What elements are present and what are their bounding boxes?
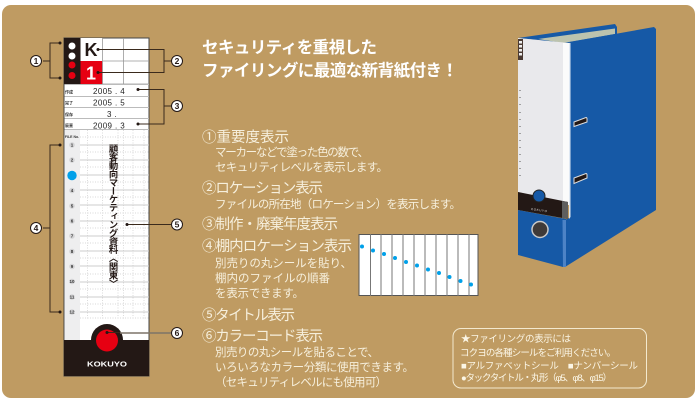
shelf number column: 10 (69, 279, 75, 284)
note box: コクヨの各種シールをご利用ください。 (460, 347, 616, 359)
date rows: 廃棄 (65, 122, 73, 128)
note box: ■アルファベットシール ■ナンバーシール (461, 361, 638, 372)
shelf number column: 8 (71, 249, 74, 254)
section 6 text: 別売りの丸シールを貼ることで、 (215, 345, 379, 359)
date rows (64, 84, 149, 130)
blue binder (518, 24, 656, 267)
section 6 text: （セキュリティレベルにも使用可） (215, 375, 387, 389)
callout 3 (136, 88, 182, 126)
shelf number column: 9 (71, 264, 74, 269)
back cover and pages (518, 24, 617, 44)
shelf number column: 5 (71, 204, 74, 208)
front cover (563, 27, 656, 267)
section 1 text (202, 129, 388, 174)
date rows: 2005 . 4 (93, 87, 125, 96)
section 2 text: ファイルの所在地（ロケーション）を表示します。 (215, 197, 461, 211)
section 1 text: ①重要度表示 (202, 129, 289, 146)
callout 4 (30, 144, 62, 314)
callout 6: 6 (175, 328, 180, 338)
date rows: 作成 (65, 88, 73, 94)
black footer with colour code seal: KOKUYO (87, 362, 128, 368)
main heading: ファイリングに最適な新背紙付き！ (202, 60, 458, 80)
shelf order chart (359, 234, 478, 296)
shelf number column: 7 (71, 234, 74, 238)
section 5 text: ⑤タイトル表示 (202, 307, 295, 324)
callout 2 (96, 48, 182, 74)
spine small numbers (519, 90, 521, 176)
finger ring (532, 222, 548, 238)
note box: ●タックタイトル・丸形（φ5、φ8、φ15） (461, 372, 612, 384)
location K cell: K (84, 40, 98, 60)
security level marker column (64, 38, 80, 84)
title grid (80, 130, 149, 320)
note box: ★ファイリングの表示には (461, 333, 571, 345)
date rows: 3 . (107, 110, 117, 119)
section 3 text: ③制作・廃棄年度表示 (202, 216, 338, 233)
lower spine blue (518, 210, 566, 267)
shelf number column (65, 130, 80, 340)
spine seal (533, 190, 545, 202)
callout 4: 4 (34, 223, 39, 233)
date rows: 2005 . 5 (93, 98, 125, 108)
section 1 text: セキュリティレベルを表示します。 (215, 161, 388, 174)
section 1 text: マーカーなどで塗った色の数で、 (215, 146, 369, 159)
main heading (202, 38, 458, 80)
section 2 text: ②ロケーション表示 (202, 180, 323, 197)
spine black band (518, 192, 568, 219)
vertical title text: 顧客動向マーケティング資料〈関東〉 (108, 144, 118, 288)
location 1 cell (80, 61, 102, 84)
section 4 text: ④棚内ロケーション表示 (202, 238, 352, 255)
spine label diagram (64, 38, 149, 376)
shelf number column: 12 (69, 310, 75, 314)
note box (453, 328, 646, 388)
shelf number column: 2 (71, 158, 74, 162)
callout 1: 1 (34, 56, 39, 66)
shelf number column: 4 (71, 188, 74, 193)
callout 5 (126, 219, 182, 230)
section 6 text (202, 328, 414, 389)
section 4 text: 別売りの丸シールを貼り、 (215, 256, 352, 270)
section 2 text (202, 180, 461, 211)
kokuyo spine logo: KOKUYO (531, 207, 548, 213)
lower label holder (574, 174, 587, 184)
section 4 text: を表示できます。 (215, 287, 304, 300)
main heading: セキュリティを重視した (202, 38, 377, 57)
date rows: 保存 (65, 111, 73, 117)
white spine (518, 38, 569, 205)
spine marker strip (518, 39, 523, 60)
callout 6 (106, 328, 182, 338)
date rows: 完了 (65, 100, 73, 106)
callout 3: 3 (175, 101, 180, 111)
section 6 text: ⑥カラーコード表示 (202, 328, 323, 345)
shelf number column: 6 (71, 218, 74, 224)
location 1 cell: 1 (86, 64, 96, 84)
callout 1 (30, 42, 62, 80)
black footer with colour code seal (64, 324, 149, 376)
section 6 text: いろいろなカラー分類に使用できます。 (215, 360, 414, 374)
upper label holder (574, 118, 587, 126)
section 4 text: 棚内のファイルの順番 (215, 271, 330, 285)
shelf number column: 11 (70, 294, 75, 300)
shelf number column: 1 (71, 142, 74, 148)
callout 2: 2 (175, 56, 180, 66)
date rows: 2009 . 3 (93, 122, 125, 130)
shelf number column: FILE No. (65, 135, 79, 139)
section 4 text (202, 238, 352, 300)
location K cell (80, 38, 102, 61)
callout 5: 5 (175, 220, 180, 230)
